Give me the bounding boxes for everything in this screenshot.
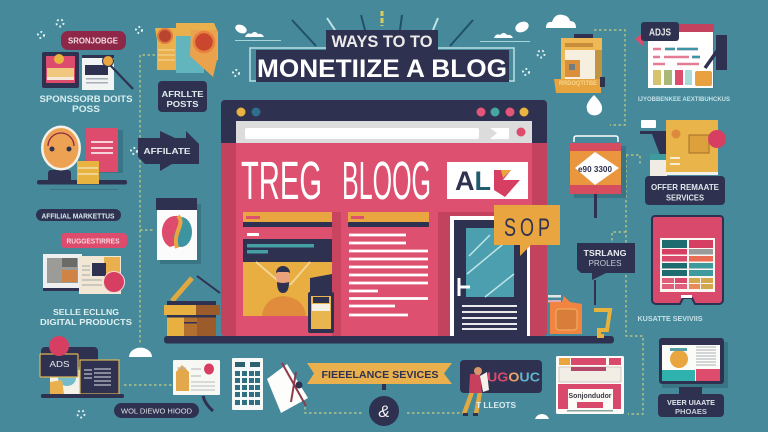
panel: ad card and label: WOL DIEWO HIOOD: [121, 406, 193, 416]
panel: affiliate posts: AFRLLTE: [162, 89, 204, 99]
panel: tablet services: KUSATTE SEVIVIIS: [638, 316, 703, 323]
panel: monitor: [658, 338, 728, 417]
arrow: affiliate: AFFILATE: [144, 146, 191, 156]
panel: trsang roles: PROLES: [588, 258, 622, 268]
panel: offer remote services: SERVICES: [666, 192, 704, 202]
panel: offer remote services: OFFER REMAATE: [651, 182, 719, 192]
panel: monitor: VEER UIAATE: [667, 398, 715, 407]
shop sign: O: [520, 213, 534, 242]
panel: yellow article: RRDOQTITBE: [559, 81, 597, 87]
panel: sponsored posts: [40, 31, 133, 114]
panel: digital products: RUGGESTIRRES: [66, 238, 120, 246]
panel: ad card and label: [114, 360, 220, 418]
column: article text: [348, 212, 429, 315]
panel: sponsored posts: SPONSSORB DOITS: [40, 94, 133, 104]
panel: yellow article: [554, 34, 605, 115]
icon: calculator: [232, 358, 263, 410]
icon: notepad with pen: [267, 363, 308, 413]
panel: digital products: SELLE ECLLNG: [53, 307, 119, 317]
logo sign: [447, 162, 528, 199]
icon: signature badge: &: [378, 402, 390, 421]
panel: central blog storefront: [221, 100, 560, 336]
panel: trsang roles: [577, 243, 635, 305]
shop sign: S: [504, 213, 516, 242]
banner: freelance services: FIEEELANCE SEVICES: [322, 370, 439, 381]
panel: logo with person: [460, 360, 542, 416]
title: [250, 11, 514, 83]
panel: affiliate marketing: AFFILIAL MARKETTUS: [42, 214, 115, 220]
panel: trsang roles: TSRLANG: [584, 248, 627, 258]
panel: affiliate posts: [155, 23, 218, 112]
panel: affiliate marketing: [36, 126, 127, 221]
icon: toolbox: [164, 276, 220, 336]
panel: jar label: e90 3300: [578, 164, 612, 174]
panel: jar label: [570, 136, 626, 218]
shop sign: [494, 205, 560, 256]
icon: signature badge: [369, 396, 399, 426]
panel: ads: [40, 336, 124, 398]
panel: tablet services: [638, 216, 723, 323]
panel: sponsored posts: SRONJOBGE: [68, 36, 119, 46]
title: WAYS TO TO: [332, 33, 433, 51]
panel: ads dashboard: [635, 22, 731, 103]
panel: web card: [556, 356, 624, 414]
panel: digital products: [40, 233, 133, 327]
panel: central blog storefront: BLOOG: [342, 151, 431, 211]
icon: poster: [156, 198, 201, 264]
icon: orange box and mug: [548, 295, 610, 336]
column: post with portrait: [243, 212, 341, 336]
banner: freelance services: [307, 363, 452, 390]
title: MONETIIZE A BLOG: [257, 55, 507, 83]
arrow: affiliate: [138, 131, 199, 171]
panel: logo with person: UGOUC: [487, 370, 541, 384]
panel: offer remote services: [640, 120, 726, 205]
shelf base: [164, 336, 614, 344]
door: [450, 216, 530, 336]
panel: ads dashboard: IJYOBBENKEE AEXTIBUHCKUS: [638, 96, 731, 103]
panel: logo with person: T LLEOTS: [476, 401, 517, 410]
panel: sponsored posts: POSS: [72, 104, 100, 114]
panel: ads: ADS: [50, 359, 70, 369]
panel: monitor: PHOAES: [675, 407, 707, 416]
panel: web card: Sonjondudor: [568, 391, 612, 400]
icon: sparkles: [38, 20, 544, 418]
logo sign: AL: [455, 166, 491, 196]
panel: affiliate posts: POSTS: [166, 99, 199, 109]
heading: blog name: TREG: [241, 151, 322, 211]
icon: clouds: [129, 15, 576, 419]
panel: ads dashboard: ADJS: [649, 28, 671, 38]
shop sign: P: [538, 213, 550, 242]
panel: digital products: DIGITAL PRODUCTS: [40, 317, 133, 327]
